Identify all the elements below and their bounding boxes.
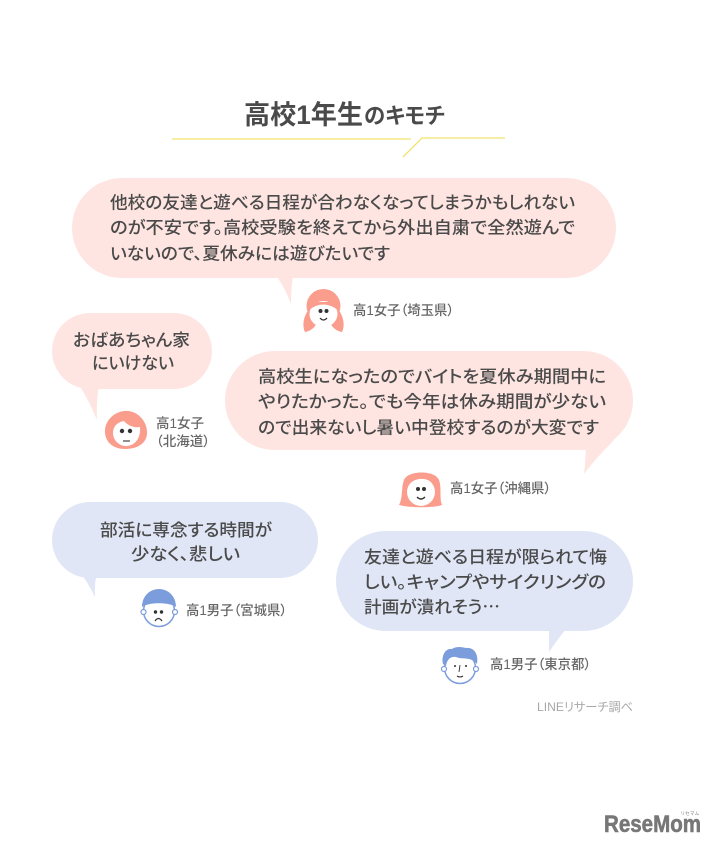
panel: speech bubble Saitama: 他校の友達と遊べる日程が合わなくなってしまうかもしれない (110, 192, 575, 212)
title: 高校1年生 (244, 100, 363, 130)
panel: speech bubble Tokyo: しい。キャンプやサイクリングの (364, 572, 606, 592)
icon: girl with short hair (105, 411, 147, 449)
icon: boy with curly hair (442, 647, 478, 684)
panel: speech bubble Saitama: のが不安です。高校受験を終えてから外出自粛で全然遊んで (110, 218, 575, 238)
label: Miyagi: 高1男子（宮城県） (186, 602, 287, 618)
panel: speech bubble Miyagi (52, 502, 318, 597)
panel: speech bubble Miyagi: 少なく、悲しい (131, 544, 240, 564)
panel: speech bubble Okinawa: やりたかった。でも今年は休み期間が少ない (257, 392, 606, 412)
panel: speech bubble Okinawa (225, 351, 633, 474)
panel: speech bubble Tokyo (336, 531, 633, 652)
panel: speech bubble Hokkaido (52, 313, 212, 420)
panel: speech bubble Tokyo: 計画が潰れそう… (364, 593, 500, 618)
panel: speech bubble Okinawa: ので出来ないし暑い中登校するのが大変です (258, 418, 599, 438)
panel: speech bubble Miyagi: 部活に専念する時間が (100, 520, 272, 540)
title underline (172, 138, 505, 157)
label: Hokkaido: 高1女子 (156, 415, 204, 431)
panel: speech bubble Tokyo: 友達と遊べる日程が限られて悔 (364, 547, 607, 567)
icon: girl with pigtails (303, 289, 344, 332)
panel: speech bubble Saitama (72, 178, 616, 304)
label: Tokyo: 高1男子（東京都） (490, 656, 591, 672)
panel: speech bubble Hokkaido: おばあちゃん家 (73, 330, 190, 350)
panel: speech bubble Okinawa: 高校生になったのでバイトを夏休み期間中に (258, 366, 606, 386)
label: Hokkaido: （北海道） (156, 434, 210, 449)
logo: ReseMom: リセマム (681, 811, 700, 817)
label: Okinawa: 高1女子（沖縄県） (450, 480, 551, 496)
label: Saitama: 高1女子（埼玉県） (353, 302, 454, 318)
icon: boy with cap hair (141, 589, 178, 626)
source note: LINEリサーチ調べ (537, 700, 633, 714)
icon: girl with bob hair (399, 472, 442, 507)
panel: speech bubble Saitama: いないので、夏休みには遊びたいです (110, 244, 390, 264)
panel: speech bubble Hokkaido: にいけない (92, 353, 174, 373)
title: のキモチ (364, 104, 445, 128)
label: Hokkaido (156, 415, 210, 449)
title (244, 100, 445, 130)
logo: ReseMom: ReseMom (604, 811, 701, 838)
